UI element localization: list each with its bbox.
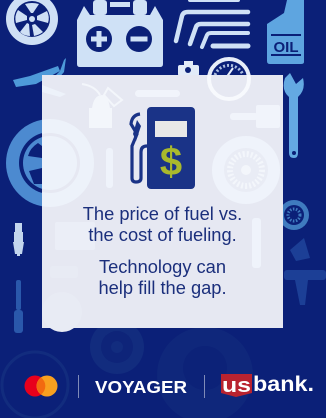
- logo: Mastercard: [24, 376, 58, 396]
- icon: car battery: [77, 0, 163, 67]
- icon: wrench faded: [106, 148, 261, 268]
- text block: headline: [83, 203, 242, 245]
- icon: battery faded: [55, 222, 95, 250]
- icon: spark plug: [13, 223, 24, 256]
- text block: headline: The price of fuel vs.: [83, 203, 242, 224]
- text block: subhead: help fill the gap.: [98, 277, 227, 298]
- icon: engine: [178, 61, 199, 76]
- icon: oil bottle: [267, 0, 304, 64]
- icon: gauge: [209, 59, 249, 99]
- panel: overlapping parts of outer icons: [42, 75, 251, 207]
- icon: alloy wheel: [6, 0, 58, 45]
- text block: subhead: [98, 256, 227, 298]
- icon: socket wrenches: [176, 0, 248, 47]
- panel: translucent white: [42, 75, 283, 328]
- icon: gauge faded: [42, 266, 82, 332]
- icon: jumper clamp: [13, 58, 66, 88]
- logo: US Bank: [221, 373, 314, 397]
- text block: headline: the cost of fueling.: [88, 224, 237, 245]
- icon: dim wheel bottom: [90, 320, 144, 374]
- icon: tire faded: [212, 136, 280, 204]
- icon: key faded: [230, 105, 280, 128]
- logo: Voyager: VOYAGER: [95, 377, 187, 397]
- logo: US Bank: us: [222, 375, 251, 397]
- icon: spray gun: [284, 238, 326, 305]
- icon: dim gauge bottom: [2, 352, 68, 418]
- icon: dim large wheel bottom: [157, 327, 253, 418]
- icon: fuel pump with dollar sign: [131, 107, 195, 189]
- label: OIL: OIL: [274, 39, 298, 56]
- icon: screwdriver faded: [135, 90, 180, 97]
- text block: subhead: Technology can: [99, 256, 226, 277]
- icon: tire left: [6, 119, 94, 207]
- logo: US Bank: bank.: [253, 373, 314, 396]
- icon: oil can faded: [82, 84, 122, 128]
- icon: small wheel: [279, 200, 309, 230]
- icon: screwdriver dim: [14, 280, 23, 333]
- icon: wrench right: [284, 73, 304, 158]
- dollar sign: $: [160, 140, 182, 184]
